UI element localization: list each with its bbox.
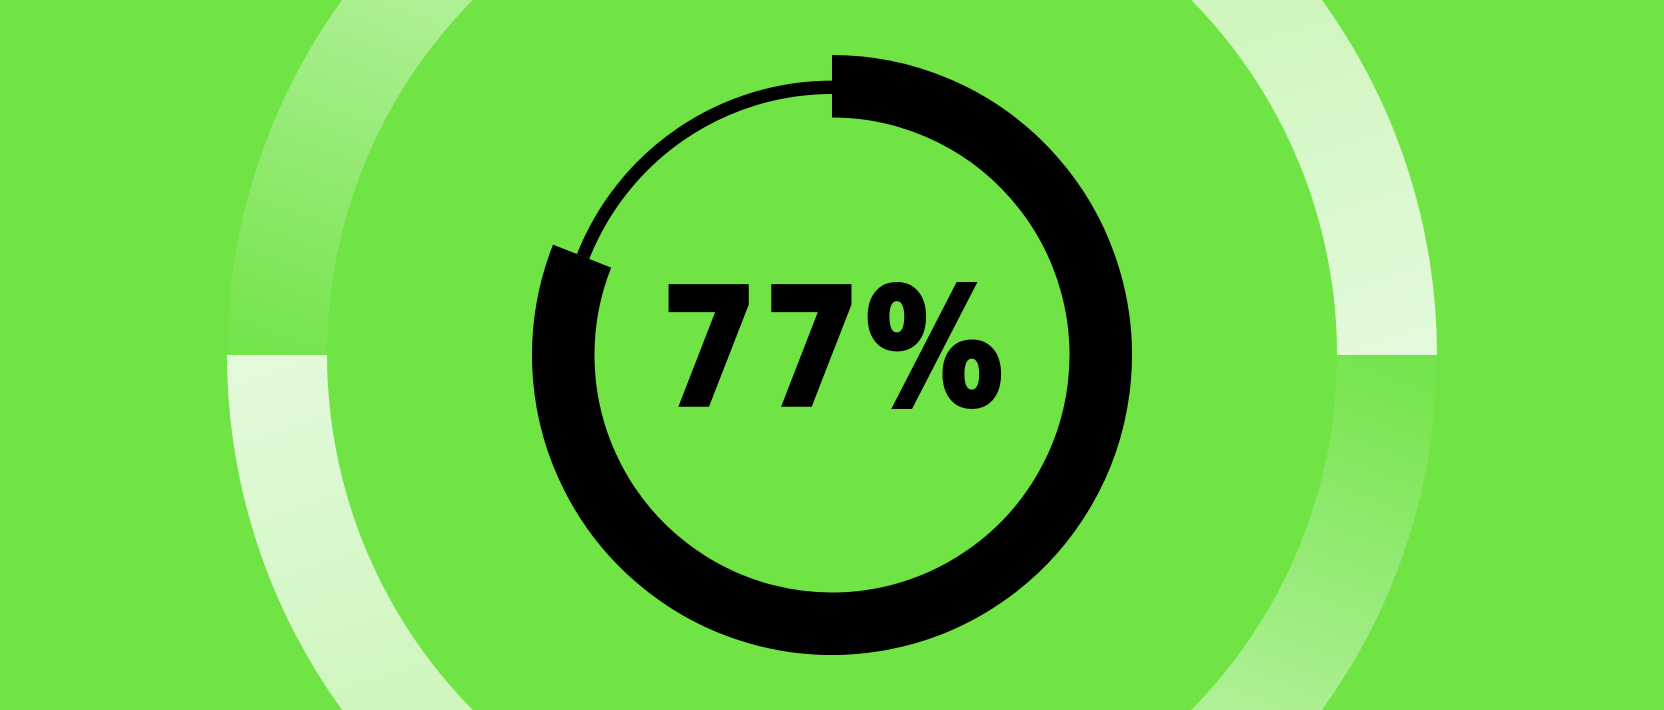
thick arc: filled share bbox=[563, 86, 1101, 624]
percentage value: 7 bbox=[765, 256, 860, 442]
donut chart: 77 percent bbox=[563, 86, 1101, 624]
percentage value: % bbox=[866, 256, 1003, 442]
outer ring: lower right fading arc bbox=[1191, 355, 1437, 710]
thin arc: remaining share bbox=[583, 87, 832, 256]
outer ring: upper left fading arc bbox=[227, 0, 473, 355]
percentage value bbox=[662, 256, 1003, 442]
outer ring: lower left light arc bbox=[227, 355, 473, 710]
outer ring: upper right light arc bbox=[1191, 0, 1437, 355]
percentage value: 7 bbox=[662, 256, 757, 442]
